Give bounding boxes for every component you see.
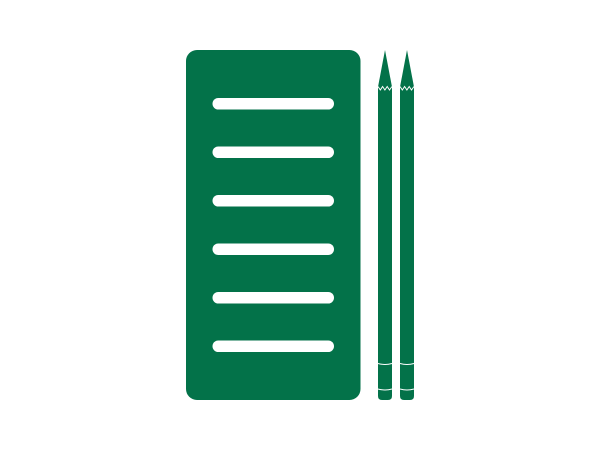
icon: right pencil — [400, 50, 414, 400]
panel: notepad — [186, 50, 360, 400]
line 6 — [212, 340, 334, 352]
line 1 — [212, 98, 334, 110]
icon: left pencil — [378, 50, 392, 400]
line 3 — [212, 195, 334, 206]
line 5 — [212, 292, 334, 304]
line 2 — [212, 146, 334, 158]
line 4 — [212, 244, 334, 255]
